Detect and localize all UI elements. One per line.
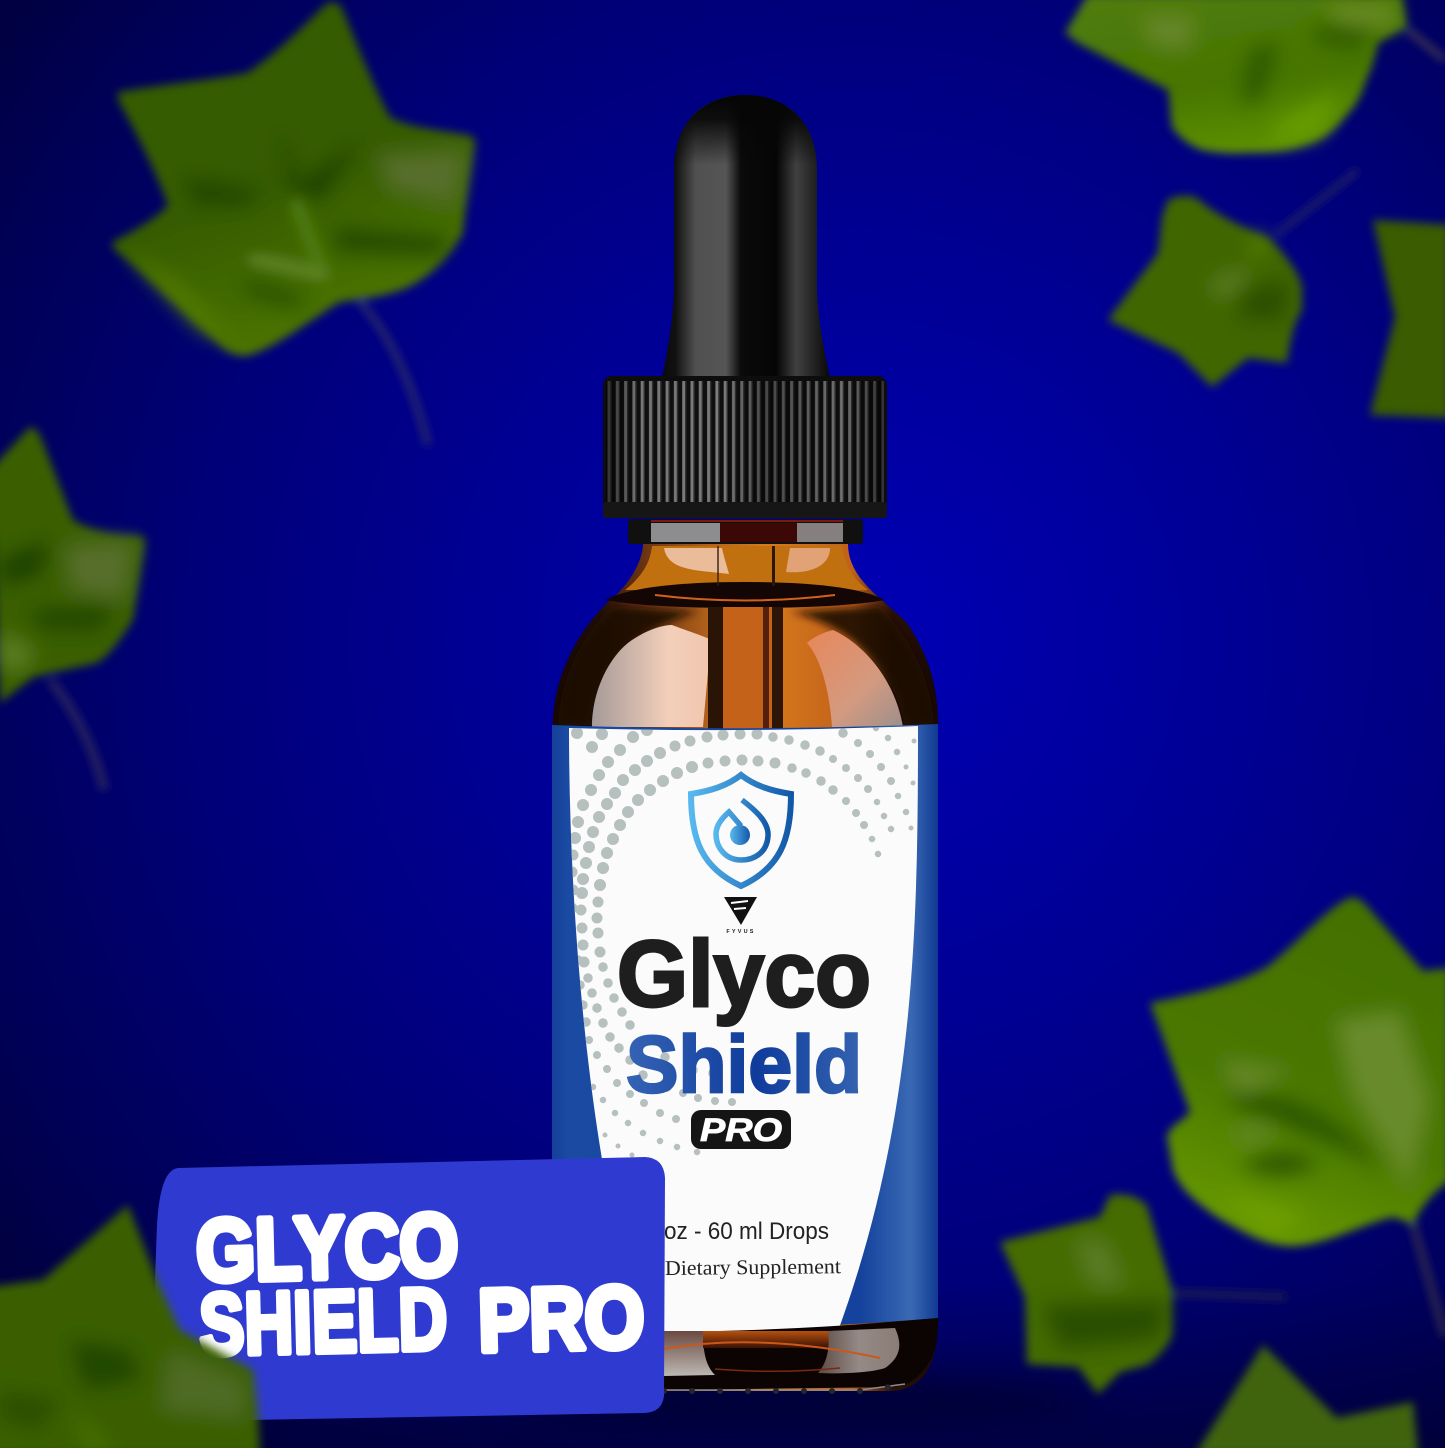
ribbed cap — [603, 376, 887, 518]
badge text: SHIELD: SHIELD — [198, 1269, 448, 1374]
leaf: top right — [1065, 0, 1445, 153]
supplement text: Dietary Supplement — [665, 1254, 841, 1280]
bottle — [552, 95, 938, 1391]
leaf: right edge — [1370, 220, 1445, 418]
glass highlight left — [592, 625, 720, 727]
bottle base — [553, 1318, 938, 1391]
neck collar — [628, 519, 863, 544]
leaf: upper right small — [1108, 170, 1358, 387]
glass highlight right — [807, 630, 903, 727]
dark shoulders — [558, 606, 934, 725]
volume text: oz - 60 ml Drops — [664, 1218, 829, 1245]
badge text: GLYCO: GLYCO — [195, 1195, 459, 1300]
leaf: large lower right — [1150, 897, 1445, 1336]
liquid level — [605, 582, 885, 608]
floor shadow — [500, 1376, 1100, 1428]
leaf: top left — [112, 2, 475, 445]
PRO tag: PRO — [700, 1112, 782, 1148]
badge panel — [155, 1157, 665, 1421]
leaf: left edge — [0, 427, 145, 790]
label white panel — [569, 726, 918, 1331]
neck highlight right — [786, 548, 830, 572]
bottle glass — [553, 544, 938, 1391]
name badge — [155, 1157, 665, 1421]
brand mark — [724, 897, 757, 935]
leaf: bottom right — [1195, 1345, 1418, 1448]
label dot pattern — [572, 728, 914, 1155]
dropper tube — [708, 607, 783, 729]
product name: Shield: Shield — [626, 1020, 862, 1110]
label blue wrap — [552, 724, 938, 1331]
leaf: bottom left foreground — [0, 1205, 260, 1448]
dropper bulb — [662, 95, 830, 378]
shield logo — [691, 775, 791, 886]
badge text: PRO: PRO — [477, 1267, 645, 1370]
leaf: lower right small — [1000, 1194, 1287, 1394]
upper neck liquid — [625, 546, 868, 590]
brand mark: FYVUS — [726, 929, 756, 935]
neck highlight left — [664, 548, 729, 574]
product name: Glyco: Glyco — [617, 921, 871, 1026]
PRO tag — [691, 1110, 791, 1149]
